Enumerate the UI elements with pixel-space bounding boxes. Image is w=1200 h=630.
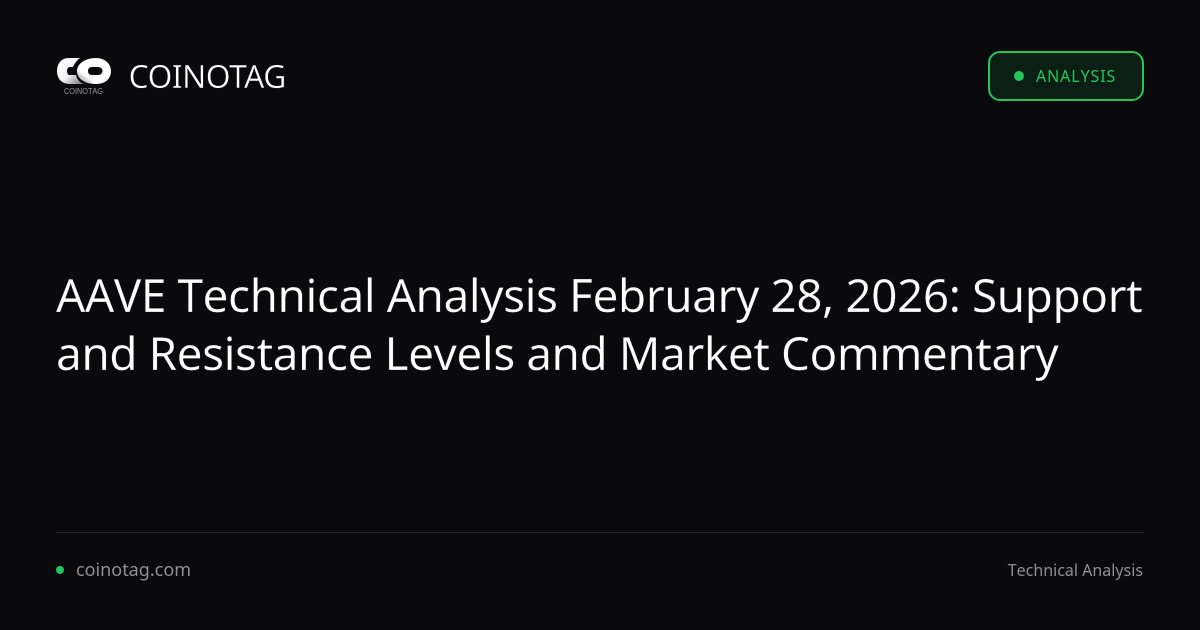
footer: site link — [56, 558, 191, 582]
divider — [56, 532, 1144, 533]
site url: coinotag.com — [76, 558, 191, 582]
footer dot — [56, 566, 64, 574]
brand wordmark: COINOTAG — [128, 55, 286, 98]
badge: analysis — [988, 51, 1144, 101]
icon: coinotag logo: COINOTAG — [64, 87, 103, 96]
title — [56, 264, 1142, 384]
header: brand logo and wordmark — [57, 55, 286, 98]
icon: coinotag logo — [57, 58, 111, 96]
badge label: ANALYSIS — [1036, 65, 1116, 87]
badge dot — [1014, 71, 1024, 81]
title: and Resistance Levels and Market Commentary — [56, 322, 1058, 384]
footer category label: Technical Analysis — [1008, 559, 1143, 581]
title: AAVE Technical Analysis February 28, 2026: Support — [56, 264, 1142, 326]
